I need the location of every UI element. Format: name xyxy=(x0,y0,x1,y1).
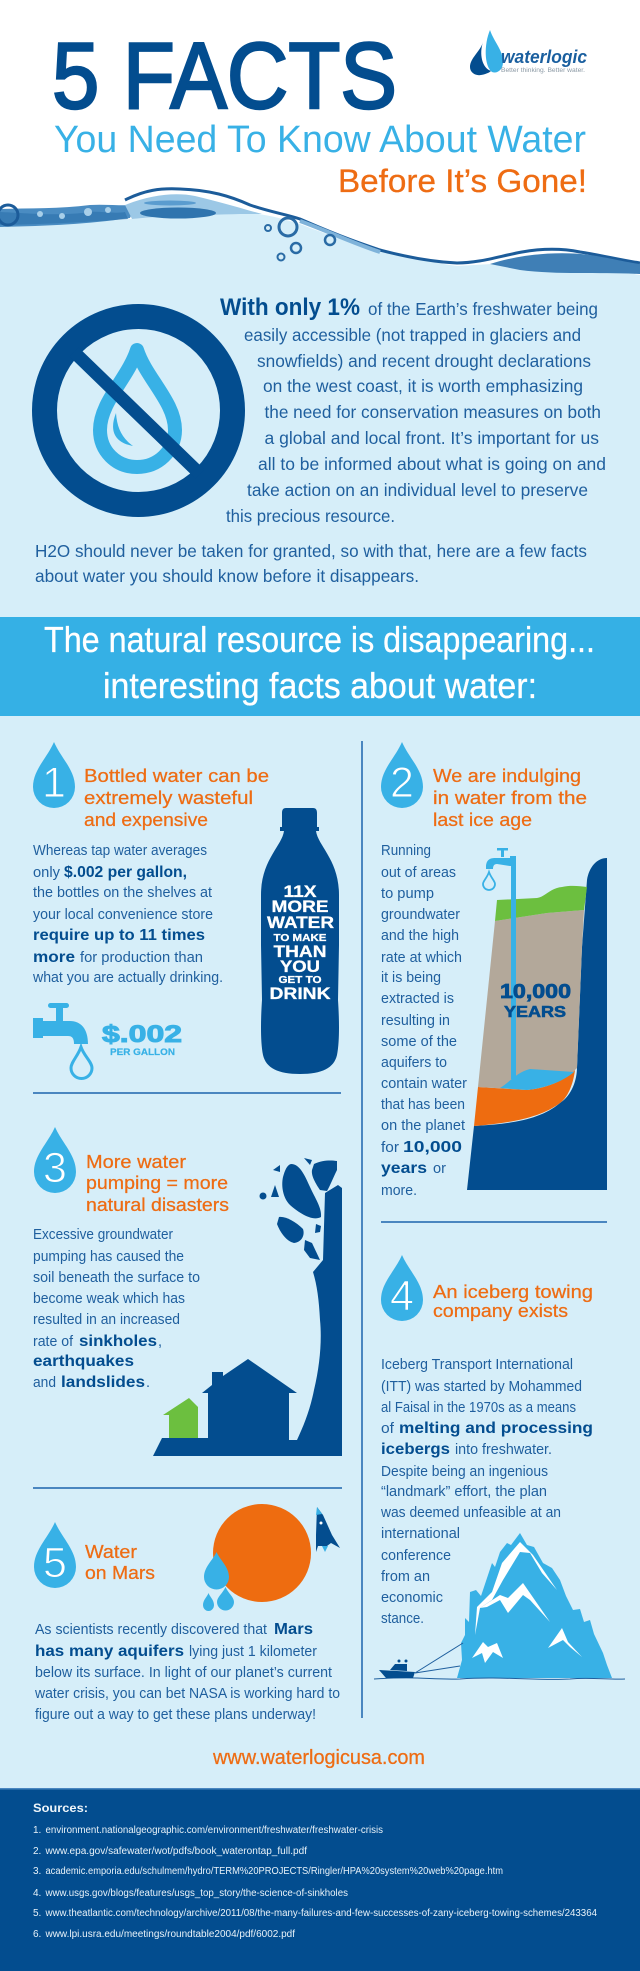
illustration: iceberg and towing boat xyxy=(374,1533,625,1679)
list: source links: www.usgs.gov/blogs/features/usgs_top_story/the-science-of-sinkholes xyxy=(45,1888,348,1899)
list: source links: 3. xyxy=(33,1866,41,1877)
heading: fact 3: More water xyxy=(86,1151,186,1172)
heading: fact 1: extremely wasteful xyxy=(84,787,253,808)
text block: intro: With only 1% xyxy=(220,294,360,321)
heading: fact 2 xyxy=(433,765,587,830)
text block: fact 2 body: rate at which xyxy=(381,950,462,966)
stat: $.002 per gallon xyxy=(102,1021,182,1057)
panel: fact 1 bottled water xyxy=(32,742,339,1078)
list: source links: environment.nationalgeographic.com/environment/freshwater/freshwater-crisis xyxy=(46,1825,383,1836)
heading: fact 2: in water from the xyxy=(433,787,587,808)
text block: fact 3 body: become weak which has xyxy=(33,1291,185,1307)
text block: fact 1 body: the bottles on the shelves at xyxy=(33,885,212,901)
text block: fact 1 body: more xyxy=(33,949,75,966)
icon: number 2 drop xyxy=(381,742,423,808)
text block: intro: all to be informed about what is going on and xyxy=(258,454,606,474)
text block: fact 2 body xyxy=(381,843,467,1199)
text block: fact 4 body: international xyxy=(381,1526,460,1542)
icon: water bottle with text xyxy=(261,808,339,1074)
text block: fact 3 body: pumping has caused the xyxy=(33,1249,184,1265)
text block: fact 5 body: Mars xyxy=(274,1621,313,1638)
heading: fact 5: Water xyxy=(85,1541,137,1562)
text block: fact 3 body xyxy=(33,1227,200,1391)
text block: fact 2 body: out of areas xyxy=(381,865,456,881)
panel: fact 3 disasters xyxy=(33,1127,342,1456)
text block: fact 5 body: water crisis, you can bet NASA is working hard to xyxy=(34,1686,340,1702)
text block: fact 1 body: Whereas tap water averages xyxy=(33,843,207,859)
text block: intro: about water you should know before it disappears. xyxy=(35,566,419,586)
text block: fact 4 body: stance. xyxy=(381,1611,424,1627)
logo: waterlogic: Better thinking. Better water. xyxy=(501,67,585,74)
text block: fact 2 body: 10,000 xyxy=(403,1139,462,1156)
text block: fact 2 body: for xyxy=(381,1140,399,1156)
logo: waterlogic: waterlogic xyxy=(501,47,587,67)
text block: fact 2 body: it is being xyxy=(381,970,441,986)
icon: faucet xyxy=(33,1003,92,1078)
icon: water bottle with text: 11X xyxy=(284,882,317,901)
text block: fact 2 body: years xyxy=(381,1160,427,1177)
title: 5 Facts: 5 FACTS xyxy=(52,23,397,128)
text block: fact 3 body: , xyxy=(158,1334,162,1350)
text block: fact 3 body: earthquakes xyxy=(33,1353,134,1370)
icon: number 1 drop: 1 xyxy=(42,759,66,807)
banner heading: interesting facts about water: xyxy=(103,665,537,706)
icon: water bottle with text: THAN xyxy=(274,942,326,961)
heading: fact 1: and expensive xyxy=(84,809,208,830)
text block: fact 1 body: $.002 per gallon, xyxy=(64,864,187,881)
heading: fact 3: pumping = more xyxy=(86,1172,228,1193)
text block: fact 3 body: sinkholes xyxy=(79,1333,157,1350)
list: source links: www.theatlantic.com/technology/archive/2011/08/the-many-failures-and-few-successes-of-zany-iceberg-towing-schemes/243364 xyxy=(45,1908,597,1919)
heading: fact 4: company exists xyxy=(433,1300,568,1321)
list: source links: 6. xyxy=(33,1929,41,1940)
text block: fact 3 body: rate of xyxy=(33,1334,74,1350)
text block: fact 1 body xyxy=(32,843,223,986)
text block: fact 4 body: “landmark” effort, the plan xyxy=(381,1484,547,1500)
panel: fact 4 iceberg xyxy=(374,1255,625,1679)
banner heading: The natural resource is disappearing... xyxy=(44,619,595,660)
panel: fact 2 ice age water xyxy=(381,742,607,1199)
text block: intro: the need for conservation measures on both xyxy=(264,402,601,422)
text block: intro: easily accessible (not trapped in glaciers and xyxy=(244,325,581,345)
chart: aquifer cross-section: 10,000 xyxy=(500,981,571,1003)
text block: fact 2 body: groundwater xyxy=(381,907,460,923)
heading: sources: Sources: xyxy=(33,1801,88,1815)
illustration: planet mars with water drops xyxy=(203,1504,311,1611)
icon: number 5 drop xyxy=(34,1522,76,1588)
text block: fact 4 body: from an xyxy=(381,1569,430,1585)
list: source links: 2. xyxy=(33,1846,41,1857)
text block: fact 2 body: more. xyxy=(381,1183,417,1199)
text block: fact 4 body: al Faisal in the 1970s as a means xyxy=(381,1400,576,1416)
column divider xyxy=(361,741,363,1718)
text block: fact 5 body: figure out a way to get these plans underway! xyxy=(35,1707,316,1723)
stat: $.002 per gallon: $.002 xyxy=(102,1021,182,1048)
list: source links: 5. xyxy=(33,1908,41,1919)
list: source links: www.epa.gov/safewater/wot/pdfs/book_waterontap_full.pdf xyxy=(44,1846,307,1857)
heading: fact 5 xyxy=(85,1541,155,1583)
text block: fact 1 body: for production than xyxy=(80,950,203,966)
heading: fact 4 xyxy=(433,1281,593,1321)
subtitle: You Need To Know About Water: You Need To Know About Water xyxy=(54,119,586,161)
stat: $.002 per gallon: PER GALLON xyxy=(110,1047,175,1057)
text block: fact 2 body: that has been xyxy=(381,1097,465,1113)
icon: number 4 drop: 4 xyxy=(390,1272,414,1320)
text block: fact 4 body: of xyxy=(381,1421,395,1437)
text block: fact 2 body: resulting in xyxy=(381,1013,450,1029)
illustration: house and landslide xyxy=(153,1158,342,1456)
text block: fact 2 body: on the planet xyxy=(381,1118,465,1134)
text block: fact 1 body: what you are actually drinking. xyxy=(32,970,223,986)
website url: www.waterlogicusa.com xyxy=(212,1747,425,1769)
list: source links: 4. xyxy=(33,1888,41,1899)
icon: water bottle with text: TO MAKE xyxy=(274,932,326,944)
text block: fact 4 body: Despite being an ingenious xyxy=(381,1464,548,1480)
text block: fact 4 body: (ITT) was started by Mohammed xyxy=(381,1379,582,1395)
text block: intro xyxy=(35,294,606,586)
icon: rocket xyxy=(316,1507,340,1552)
list: source links xyxy=(33,1825,597,1940)
text block: fact 3 body: landslides xyxy=(61,1374,145,1391)
list: source links: academic.emporia.edu/schulmem/hydro/TERM%20PROJECTS/Ringler/HPA%20system%20web%20page.htm xyxy=(46,1866,503,1877)
icon: number 3 drop xyxy=(34,1127,76,1193)
heading: fact 1: Bottled water can be xyxy=(84,765,269,786)
text block: fact 3 body: resulted in an increased xyxy=(33,1312,180,1328)
list: source links: 1. xyxy=(33,1825,41,1836)
text block: fact 2 body: Running xyxy=(381,843,431,859)
heading: fact 1 xyxy=(84,765,269,830)
text block: fact 2 body: to pump xyxy=(381,886,434,902)
chart: aquifer cross-section xyxy=(467,848,607,1190)
text block: fact 5 body: below its surface. In light of our planet’s current xyxy=(35,1665,332,1681)
heading: fact 3: natural disasters xyxy=(86,1194,229,1215)
icon: no water sign xyxy=(44,316,232,504)
icon: water bottle with text: MORE xyxy=(272,897,328,916)
text block: fact 3 body: soil beneath the surface to xyxy=(33,1270,200,1286)
icon: water bottle with text: YOU xyxy=(280,957,320,976)
text block: fact 4 body: melting and processing xyxy=(399,1420,593,1437)
text block: fact 5 body: lying just 1 kilometer xyxy=(189,1644,317,1660)
text block: fact 5 body: As scientists recently discovered that xyxy=(35,1622,267,1638)
text block: fact 3 body: and xyxy=(33,1375,56,1391)
panel: fact 5 mars xyxy=(34,1504,340,1723)
icon: number 3 drop: 3 xyxy=(43,1144,67,1192)
banner heading xyxy=(0,617,640,716)
panel: sources footer xyxy=(0,1788,640,1971)
heading: fact 4: An iceberg towing xyxy=(433,1281,593,1302)
text block: fact 4 body: into freshwater. xyxy=(455,1442,552,1458)
text block: fact 1 body: require up to 11 times xyxy=(33,927,205,944)
text block: fact 2 body: contain water xyxy=(381,1076,467,1092)
text block: intro: this precious resource. xyxy=(226,506,395,526)
heading: fact 2: last ice age xyxy=(433,809,532,830)
icon: water bottle with text: WATER xyxy=(267,913,334,932)
text block: fact 4 body: conference xyxy=(381,1548,451,1564)
heading: fact 2: We are indulging xyxy=(433,765,581,786)
text block: fact 3 body: Excessive groundwater xyxy=(33,1227,173,1243)
text block: fact 1 body: only xyxy=(33,865,61,881)
text block: fact 1 body: your local convenience store xyxy=(33,907,213,923)
text block: fact 4 body xyxy=(380,1357,593,1627)
icon: water bottle with text: GET TO xyxy=(278,974,322,986)
icon: number 5 drop: 5 xyxy=(43,1539,67,1587)
text block: fact 4 body: Iceberg Transport International xyxy=(381,1357,573,1373)
text block: fact 4 body: economic xyxy=(381,1590,443,1606)
text block: fact 4 body: icebergs xyxy=(381,1441,450,1458)
text block: fact 5 body xyxy=(34,1621,340,1723)
icon: number 2 drop: 2 xyxy=(390,759,414,807)
text block: fact 2 body: aquifers to xyxy=(381,1055,447,1071)
text block: fact 2 body: some of the xyxy=(381,1034,457,1050)
subtitle: Before It's Gone: Before It’s Gone! xyxy=(338,163,587,199)
icon: number 1 drop xyxy=(33,742,75,808)
text block: fact 2 body: or xyxy=(433,1161,446,1177)
chart: aquifer cross-section: YEARS xyxy=(504,1004,566,1021)
text block: intro: snowfields) and recent drought declarations xyxy=(257,351,591,371)
text block: intro: of the Earth’s freshwater being xyxy=(368,299,598,319)
wave illustration xyxy=(0,189,640,274)
heading: fact 3 xyxy=(86,1151,229,1215)
text block: fact 3 body: . xyxy=(146,1375,150,1391)
text block: intro: take action on an individual level to preserve xyxy=(247,480,588,500)
list: source links: www.lpi.usra.edu/meetings/roundtable2004/pdf/6002.pdf xyxy=(45,1929,295,1940)
icon: water bottle with text: DRINK xyxy=(270,984,331,1003)
heading: fact 5: on Mars xyxy=(85,1562,155,1583)
text block: intro: a global and local front. It’s important for us xyxy=(264,428,599,448)
text block: intro: on the west coast, it is worth emphasizing xyxy=(263,376,583,396)
text block: intro: H2O should never be taken for granted, so with that, here are a few facts xyxy=(35,541,587,561)
text block: fact 2 body: extracted is xyxy=(381,991,454,1007)
text block: fact 5 body: has many aquifers xyxy=(35,1643,184,1660)
logo: waterlogic xyxy=(470,30,587,75)
text block: fact 4 body: was deemed unfeasible at an xyxy=(380,1505,561,1521)
icon: number 4 drop xyxy=(381,1255,423,1321)
text block: fact 2 body: and the high xyxy=(381,928,459,944)
